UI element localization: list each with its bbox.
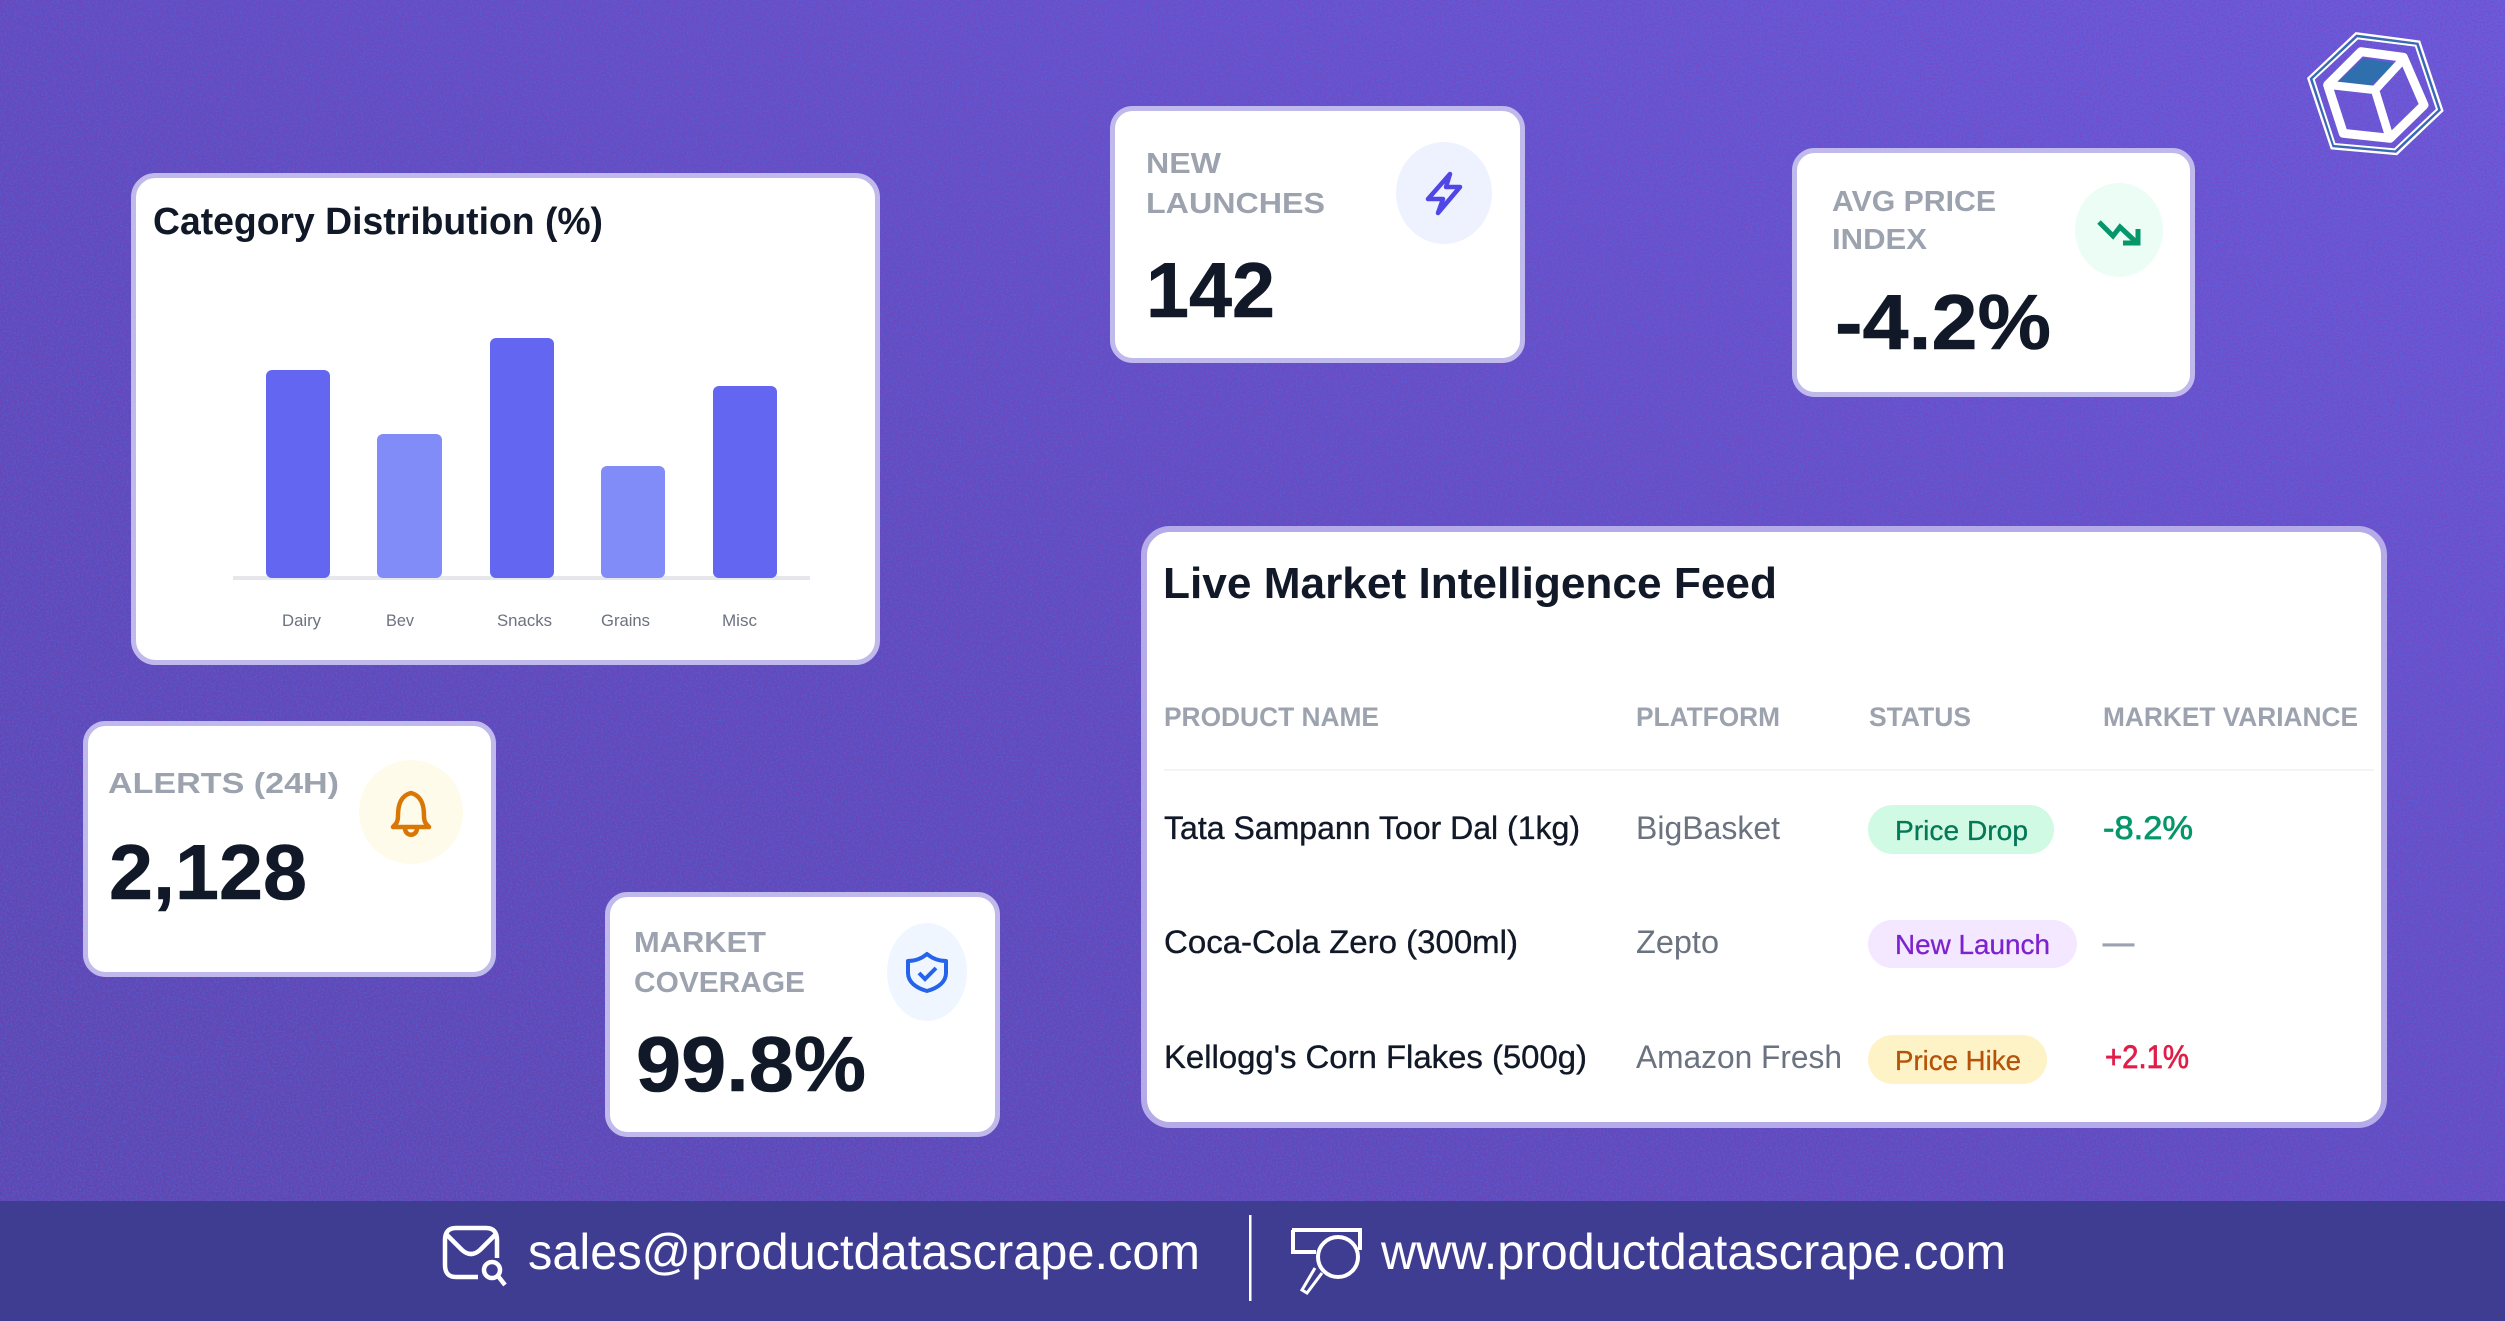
value: 142: 142 — [1146, 246, 1275, 334]
panel: alerts 24h — [86, 724, 494, 974]
logo: hexagon cube — [2308, 33, 2442, 154]
bar chart: Dairy — [282, 611, 321, 630]
heading: category distribution: Category Distribution (%) — [153, 201, 603, 243]
panel: market coverage — [608, 894, 998, 1134]
row: Tata Sampann: -8.2% — [2103, 810, 2193, 846]
label: market coverage: COVERAGE — [634, 967, 805, 999]
label: alerts: ALERTS (24H) — [108, 768, 339, 800]
table header — [1164, 702, 2374, 771]
panel: category distribution chart — [134, 176, 878, 662]
divider — [1249, 1215, 1252, 1301]
label: new launches: LAUNCHES — [1146, 188, 1325, 220]
bar chart — [233, 338, 810, 630]
row: Coca-Cola — [1164, 920, 2134, 968]
table header: PRODUCT NAME — [1164, 702, 1379, 732]
row: Coca-Cola: Coca-Cola Zero (300ml) — [1164, 924, 1518, 960]
value: -4.2%: -4.2% — [1835, 278, 2051, 366]
panel: live market intelligence feed — [1144, 529, 2384, 1125]
icon: mail — [445, 1228, 505, 1285]
icon: trending down — [2075, 183, 2163, 277]
table header: MARKET VARIANCE — [2103, 702, 2358, 732]
row: Kellogg's: +2.1% — [2105, 1039, 2189, 1075]
bar chart: Bev — [386, 611, 414, 630]
icon: web search — [1292, 1230, 1360, 1293]
bar chart: Misc — [722, 611, 757, 630]
label: market coverage: MARKET — [634, 927, 766, 959]
bar chart: Snacks — [497, 611, 552, 630]
footer bar — [0, 1201, 2505, 1321]
row: Kellogg's: Price Hike — [1895, 1045, 2021, 1076]
text: email: sales@productdatascrape.com — [528, 1224, 1200, 1280]
row: Kellogg's: Amazon Fresh — [1636, 1039, 1842, 1075]
label: avg price index: AVG PRICE — [1832, 186, 1996, 218]
row: Tata Sampann: BigBasket — [1636, 810, 1780, 846]
row: Tata Sampann: Tata Sampann Toor Dal (1kg) — [1164, 810, 1580, 846]
text: website: www.productdatascrape.com — [1380, 1224, 2006, 1280]
row: Tata Sampann: Price Drop — [1895, 815, 2028, 846]
row: Coca-Cola: New Launch — [1895, 929, 2050, 960]
panel: new launches — [1112, 108, 1522, 360]
row: Coca-Cola: Zepto — [1636, 924, 1719, 960]
value: 99.8%: 99.8% — [636, 1020, 866, 1108]
panel: avg price index — [1794, 150, 2192, 394]
row: Kellogg's: Kellogg's Corn Flakes (500g) — [1164, 1039, 1587, 1075]
icon: shield check — [887, 923, 967, 1021]
label: new launches: NEW — [1146, 148, 1222, 180]
row: Tata Sampann — [1164, 805, 2193, 854]
bar chart: Grains — [601, 611, 650, 630]
value: 2,128: 2,128 — [109, 828, 307, 916]
row: Kellogg's — [1164, 1035, 2189, 1084]
row: Coca-Cola: — — [2103, 924, 2134, 960]
icon: lightning bolt — [1396, 142, 1492, 244]
heading: live feed: Live Market Intelligence Feed — [1163, 559, 1777, 608]
table header: STATUS — [1869, 702, 1971, 732]
icon: bell — [359, 760, 463, 864]
label: avg price index: INDEX — [1832, 224, 1928, 256]
table header: PLATFORM — [1636, 702, 1780, 732]
